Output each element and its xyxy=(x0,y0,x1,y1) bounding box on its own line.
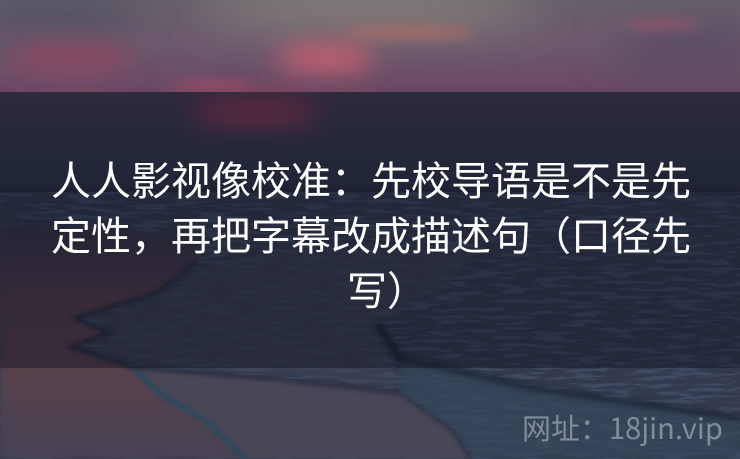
title: 定性，再把字幕改成描述句（口径先 xyxy=(51,215,691,259)
title: 写） xyxy=(347,270,427,314)
title xyxy=(51,160,691,314)
watermark: 网址：18jin.vip xyxy=(522,406,723,448)
background photo: sea and reflection xyxy=(0,92,740,202)
dark overlay band xyxy=(0,92,740,368)
background photo: water waves xyxy=(0,192,740,459)
background photo: dusk sky xyxy=(0,0,740,92)
title: 人人影视像校准：先校导语是不是先 xyxy=(51,160,691,204)
background photo: wet sand xyxy=(0,225,740,459)
